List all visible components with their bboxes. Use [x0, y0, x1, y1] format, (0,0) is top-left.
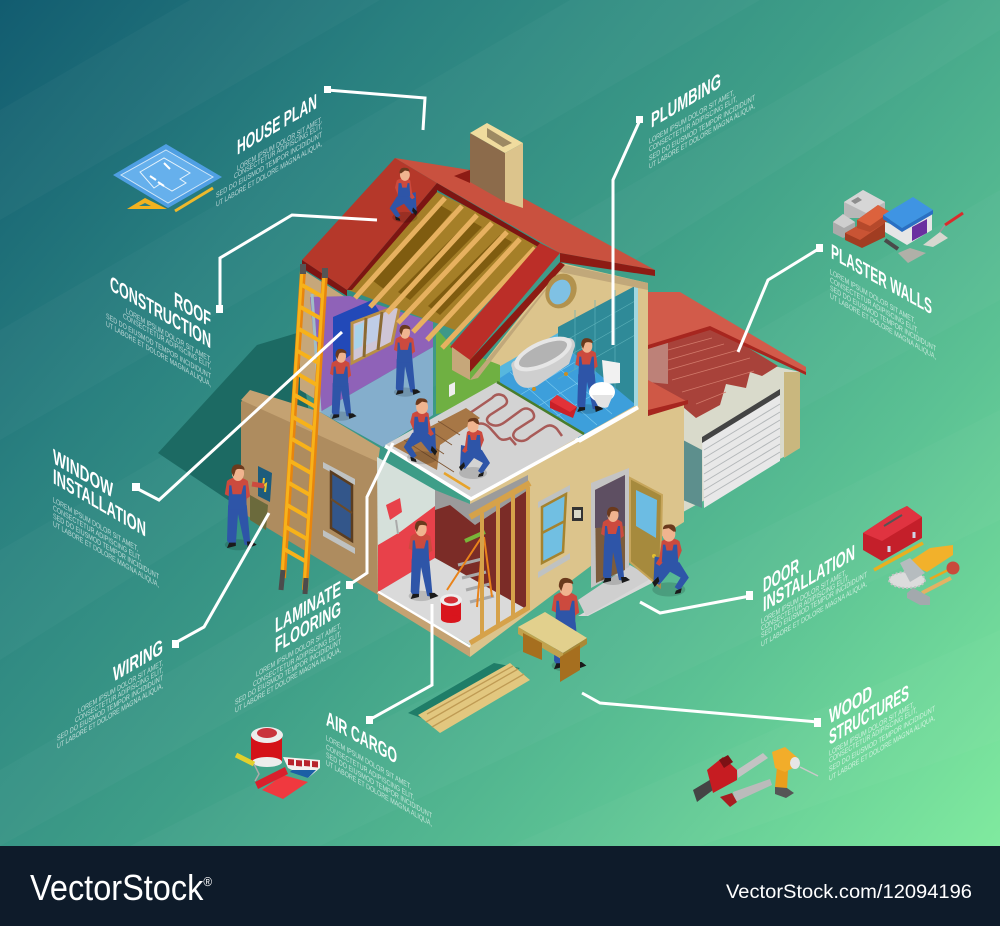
text block: air cargo: UT LABORE ET DOLORE MAGNA ALIQUA, [326, 759, 432, 828]
footer bar: ® [203, 874, 212, 889]
text block: window installation [53, 444, 159, 589]
text block: plaster walls: SED DO EIUSMOD TEMPOR INCIDIDUNT [830, 284, 936, 353]
text block: wiring: CONSECTETUR ADIPISCING ELIT, [75, 665, 163, 725]
garage [648, 292, 806, 512]
icon: paint set [236, 727, 320, 799]
icon: bathtub [509, 330, 577, 391]
worker: flooring 2 [459, 418, 490, 479]
footer bar: VectorStock.com/12094196 [726, 882, 972, 903]
spirit level [444, 473, 470, 489]
text block: window installation: WINDOW [53, 444, 113, 503]
text block: house plan: CONSECTETUR ADIPISCING ELIT, [234, 121, 322, 181]
icon: door tools [863, 506, 960, 605]
worker: door outer [652, 524, 689, 597]
garage roof [648, 292, 806, 375]
worker: painter [409, 521, 439, 601]
text block: laminate flooring: LOREM IPSUM DOLOR SIT AMET, [256, 621, 341, 679]
lumber shadow [408, 663, 520, 722]
worker: plumber [575, 338, 603, 414]
text block: wood structures: STRUCTURES [829, 679, 909, 750]
text block: laminate flooring: FLOORING [275, 595, 341, 658]
paint can on floor [440, 594, 462, 623]
icon: toilet [589, 360, 620, 408]
text block: laminate flooring [235, 575, 341, 715]
window frame being carried [352, 305, 400, 363]
trowel [923, 232, 948, 247]
leader lines [132, 86, 823, 727]
bucket [885, 214, 932, 245]
text block: wood structures: CONSECTETUR ADIPISCING ELIT, [829, 705, 917, 765]
text block: wiring [57, 634, 163, 751]
gable roof [450, 243, 560, 360]
text block: plaster walls: LOREM IPSUM DOLOR SIT AMET, [830, 268, 915, 325]
worker: electrician [225, 464, 272, 550]
text block: air cargo [326, 706, 432, 828]
worker: flooring 1 [404, 398, 437, 464]
text block: wood structures: UT LABORE ET DOLORE MAGNA ALIQUA, [829, 713, 935, 783]
text block: wood structures [829, 679, 935, 783]
room: upper left with purple wall [310, 294, 433, 447]
rear roof slope [395, 158, 655, 270]
text block: plaster walls [830, 239, 936, 361]
text block: air cargo: SED DO EIUSMOD TEMPOR INCIDIDUNT [326, 751, 432, 820]
text block: laminate flooring: LAMINATE [275, 575, 341, 638]
open door [630, 478, 662, 587]
room: bathroom [494, 286, 638, 441]
text block: window installation: INSTALLATION [53, 464, 146, 542]
icon: blueprint set [113, 144, 222, 211]
door frame and opening [591, 468, 629, 588]
text block: air cargo: CONSECTETUR ADIPISCING ELIT, [326, 743, 414, 802]
text block: door installation: SED DO EIUSMOD TEMPOR INCIDIDUNT [761, 570, 867, 640]
text block: roof construction: ROOF [174, 287, 211, 332]
blocks [844, 190, 885, 218]
footer bar: VectorStock [30, 867, 222, 908]
text block: plaster walls: CONSECTETUR ADIPISCING ELIT, [830, 276, 918, 335]
step [578, 573, 652, 616]
text block: wiring: UT LABORE ET DOLORE MAGNA ALIQUA, [57, 681, 163, 751]
text block: house plan: HOUSE PLAN [237, 88, 317, 160]
text block: plaster walls: UT LABORE ET DOLORE MAGNA ALIQUA, [830, 292, 936, 361]
text block: wood structures: SED DO EIUSMOD TEMPOR INCIDIDUNT [829, 704, 935, 774]
text block: roof construction: SED DO EIUSMOD TEMPOR INCIDIDUNT [106, 312, 211, 381]
text block: window installation: UT LABORE ET DOLORE MAGNA ALIQUA, [53, 520, 159, 589]
main cream wall [470, 263, 648, 657]
text block: air cargo: LOREM IPSUM DOLOR SIT AMET, [326, 734, 411, 791]
text block: laminate flooring: CONSECTETUR ADIPISCING ELIT, [253, 629, 341, 689]
laminate patch [393, 408, 480, 470]
text block: house plan: LOREM IPSUM DOLOR SIT AMET, [237, 115, 322, 173]
worker: carpenter [552, 578, 586, 672]
text block: air cargo: AIR CARGO [326, 706, 397, 769]
room: upper floor with heating and laminate [385, 382, 638, 499]
panel shadow [250, 495, 268, 530]
worker: door inner [601, 507, 630, 585]
roof and attic [302, 123, 655, 380]
wall lamp [572, 507, 583, 521]
icon: plaster materials [833, 190, 963, 263]
stepladder [447, 532, 494, 607]
text block: door installation: UT LABORE ET DOLORE MAGNA ALIQUA, [761, 579, 867, 649]
main left roof [302, 158, 437, 290]
paint roller [386, 498, 402, 534]
text block: house plan: UT LABORE ET DOLORE MAGNA ALIQUA, [216, 139, 322, 209]
text block: plumbing [649, 67, 755, 171]
worker: window left [330, 349, 357, 421]
house shadow [158, 333, 310, 510]
socket [449, 382, 455, 397]
text block: roof construction: UT LABORE ET DOLORE MAGNA ALIQUA, [106, 320, 211, 389]
upper left exterior wall [300, 268, 350, 420]
room: ground floor with red paint [377, 457, 530, 657]
text block: door installation [761, 539, 867, 649]
text block: wiring: SED DO EIUSMOD TEMPOR INCIDIDUNT [57, 673, 163, 743]
text block: wiring: WIRING [113, 634, 163, 687]
text block: wiring: LOREM IPSUM DOLOR SIT AMET, [78, 658, 163, 716]
icon: wood tools [693, 747, 818, 807]
bricks [845, 217, 885, 248]
text block: window installation: CONSECTETUR ADIPISCING ELIT, [53, 504, 141, 563]
icon: electrical panel [258, 466, 272, 502]
text block: plumbing: UT LABORE ET DOLORE MAGNA ALIQUA, [649, 101, 755, 171]
chimney [470, 123, 523, 208]
text block: roof construction: CONSTRUCTION [110, 271, 211, 353]
text block: plumbing: CONSECTETUR ADIPISCING ELIT, [649, 94, 737, 154]
text block: wood structures: WOOD [829, 680, 872, 729]
ladder [281, 264, 325, 594]
roller door [702, 389, 780, 508]
text block: roof construction: CONSECTETUR ADIPISCING ELIT, [123, 312, 211, 371]
left wall window [323, 462, 355, 485]
trim [452, 347, 470, 380]
garage brick wall [648, 326, 778, 418]
workbench [518, 612, 587, 682]
spatula [885, 240, 898, 249]
lower side wing wall [648, 404, 684, 545]
worker: roof [390, 168, 418, 223]
icon: toolbox on floor [550, 395, 577, 418]
text block: door installation: INSTALLATION [763, 539, 855, 617]
text block: laminate flooring: UT LABORE ET DOLORE MAGNA ALIQUA, [235, 645, 341, 715]
text block: roof construction: LOREM IPSUM DOLOR SIT AMET, [126, 307, 211, 364]
worker: window right [394, 325, 421, 397]
rafters [355, 198, 535, 348]
front wall window [538, 485, 570, 508]
text block: laminate flooring: SED DO EIUSMOD TEMPOR INCIDIDUNT [235, 637, 341, 707]
text block: house plan: SED DO EIUSMOD TEMPOR INCIDIDUNT [216, 130, 322, 200]
footer bar [0, 846, 1000, 926]
text block: window installation: SED DO EIUSMOD TEMPOR INCIDIDUNT [53, 512, 159, 581]
lumber pile [418, 663, 530, 733]
text block: plumbing: LOREM IPSUM DOLOR SIT AMET, [649, 88, 734, 146]
text block: window installation: LOREM IPSUM DOLOR SIT AMET, [53, 496, 138, 553]
text block: door installation: DOOR [763, 553, 799, 598]
heating pipes [470, 394, 562, 441]
wall frame studs [470, 483, 530, 643]
text block: plumbing: SED DO EIUSMOD TEMPOR INCIDIDUNT [649, 93, 755, 163]
text block: wood structures: LOREM IPSUM DOLOR SIT AMET, [829, 700, 914, 758]
text block: roof construction [106, 271, 211, 389]
front wall: window door step [538, 468, 689, 616]
text block: house plan [216, 88, 322, 209]
round attic window [539, 268, 583, 314]
text block: door installation: LOREM IPSUM DOLOR SIT AMET, [761, 568, 846, 626]
left wall ground floor [241, 390, 380, 595]
text block: plumbing: PLUMBING [651, 67, 721, 133]
text block: door installation: CONSECTETUR ADIPISCING ELIT, [761, 573, 849, 633]
attic interior [348, 192, 540, 330]
wall strip: green interior [436, 328, 500, 414]
